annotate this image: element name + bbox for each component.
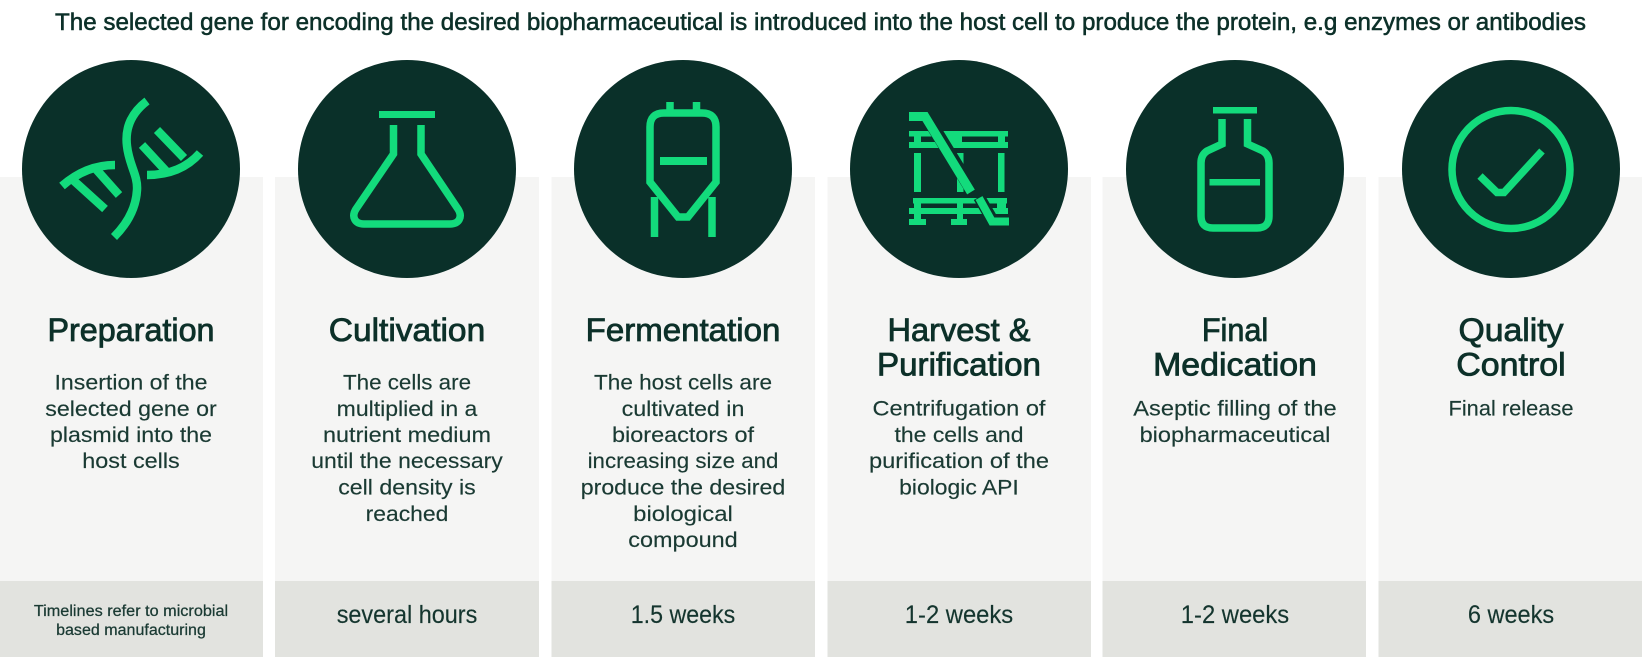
timeline (275, 581, 539, 657)
timeline: 1-2 weeks (905, 601, 1013, 629)
panel background (275, 177, 539, 581)
icon: medicine bottle (1126, 60, 1344, 278)
description (581, 372, 785, 552)
panel: quality control (1378, 60, 1642, 657)
heading: Preparation (48, 312, 215, 348)
description: nutrient medium (323, 424, 491, 447)
panel background (0, 177, 263, 581)
description: cultivated in (622, 398, 744, 421)
panel background (1102, 177, 1366, 581)
timeline: 1-2 weeks (1181, 601, 1289, 629)
heading: Fermentation (586, 312, 780, 348)
description: the cells and (894, 424, 1024, 447)
description: biologic API (899, 476, 1019, 500)
heading: Medication (1153, 346, 1317, 382)
heading: Cultivation (329, 312, 485, 348)
heading: Purification (877, 346, 1041, 382)
timeline note: Timelines refer to microbial (34, 603, 228, 620)
description: increasing size and (588, 450, 778, 473)
description: The cells are (343, 372, 471, 394)
description: compound (628, 529, 738, 552)
description: biopharmaceutical (1140, 424, 1330, 447)
description: host cells (82, 450, 180, 473)
description: until the necessary (311, 450, 503, 473)
description (311, 372, 503, 526)
description: cell density is (338, 476, 476, 500)
description: plasmid into the (50, 424, 212, 447)
icon: check mark in circle (1402, 60, 1620, 278)
description: Aseptic filling of the (1133, 398, 1337, 420)
icon: bioreactor (574, 60, 792, 278)
panel: fermentation (552, 60, 815, 657)
panel: preparation (0, 60, 263, 657)
description: purification of the (869, 450, 1049, 473)
heading (1153, 312, 1317, 382)
icon: DNA helix (22, 60, 240, 278)
timeline (552, 581, 815, 657)
timeline: several hours (337, 601, 477, 629)
panel: cultivation (275, 60, 539, 657)
description (45, 372, 217, 473)
panel background (828, 177, 1091, 581)
heading: Quality (1458, 312, 1564, 348)
description: The host cells are (594, 372, 772, 394)
description: Insertion of the (54, 372, 208, 394)
description: multiplied in a (337, 398, 478, 421)
description: selected gene or (45, 398, 217, 421)
timeline (1102, 581, 1366, 657)
timeline (1378, 581, 1642, 657)
description (869, 398, 1049, 500)
description (1133, 398, 1337, 447)
timeline note: based manufacturing (56, 622, 206, 639)
title: The selected gene for encoding the desired biopharmaceutical is introduced into the host cell to produce the protein, e.g enzymes or antibodies (55, 9, 1586, 36)
heading: Harvest & (888, 312, 1030, 348)
description: produce the desired (581, 476, 785, 500)
description: bioreactors of (612, 424, 754, 447)
panel background (1378, 177, 1642, 581)
timeline note (0, 581, 263, 657)
panel: harvest and purification (828, 60, 1091, 657)
panel: final medication (1102, 60, 1366, 657)
timeline: 1.5 weeks (631, 601, 735, 629)
description: Final release (1448, 398, 1574, 420)
heading: Control (1456, 346, 1566, 382)
timeline (828, 581, 1091, 657)
icon: flask (298, 60, 516, 278)
description: reached (366, 503, 448, 526)
timeline: 6 weeks (1468, 601, 1554, 629)
heading (1456, 312, 1566, 382)
panel background (552, 177, 815, 581)
icon: purification rack (850, 60, 1068, 278)
heading (877, 312, 1041, 382)
description: Centrifugation of (872, 398, 1046, 420)
description: biological (633, 503, 733, 526)
heading: Final (1202, 312, 1268, 348)
